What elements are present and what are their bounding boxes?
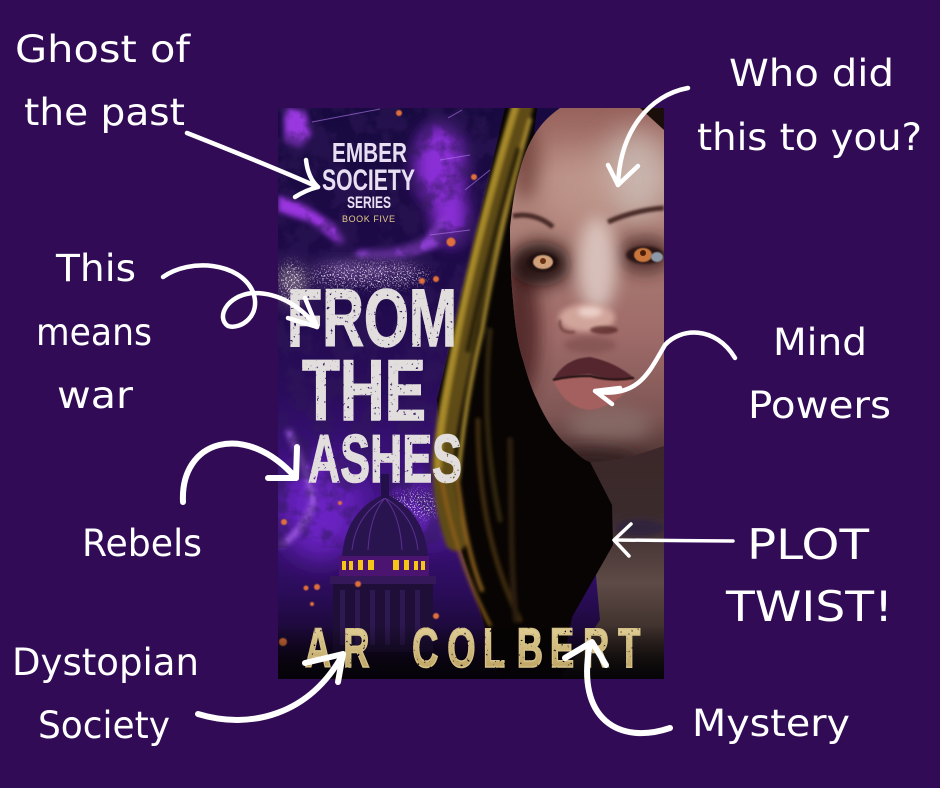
label: this means war — [36, 247, 152, 417]
arrow: plot twist — [614, 524, 733, 556]
series title: SOCIETY — [322, 164, 415, 197]
forehead highlight — [600, 130, 670, 220]
label: dystopian society: Dystopian — [12, 641, 199, 684]
label: dystopian society — [12, 641, 199, 747]
black hair mass — [437, 108, 613, 679]
label: mind powers: Mind — [773, 321, 867, 364]
arrow: who did this — [608, 88, 688, 185]
label: this means war: means — [36, 311, 152, 354]
hair strands — [438, 108, 530, 625]
neck — [574, 446, 664, 662]
chin — [568, 407, 652, 443]
author — [305, 627, 640, 668]
purple nebula splashes — [278, 108, 468, 560]
eyes — [528, 246, 664, 271]
embers — [279, 110, 477, 646]
eye sockets — [510, 242, 570, 286]
face — [510, 108, 664, 462]
lips — [553, 357, 634, 410]
top right hair — [640, 108, 664, 130]
label: plot twist — [725, 520, 893, 631]
capitol dome — [330, 474, 436, 652]
eyebrows — [513, 215, 553, 227]
nose shadow under — [564, 337, 616, 353]
author: AR — [305, 617, 369, 680]
author: COLBERT — [412, 617, 641, 680]
book title: THE — [302, 343, 426, 439]
label: who did this to you: Who did — [729, 52, 894, 95]
arrow: mystery — [565, 642, 670, 733]
book cover — [278, 105, 673, 680]
white speckle dust — [279, 262, 439, 518]
arrow: rebels — [183, 444, 297, 502]
book title: ASHES — [308, 421, 462, 497]
label: dystopian society: Society — [38, 704, 170, 747]
label: ghost of the past: the past — [24, 91, 185, 134]
series title — [322, 137, 415, 224]
label: rebels: Rebels — [82, 522, 202, 565]
series title: SERIES — [347, 193, 391, 212]
label: mind powers: Powers — [748, 384, 891, 427]
series title: BOOK FIVE — [342, 214, 395, 224]
bottom fade — [278, 631, 664, 679]
nose highlight — [577, 217, 617, 313]
label: who did this to you: this to you? — [697, 116, 922, 159]
label: ghost of the past: Ghost of — [15, 28, 191, 71]
arrow: ghost of the past — [187, 133, 318, 197]
arrow: mind powers — [595, 333, 735, 404]
label: ghost of the past — [15, 28, 191, 134]
book title: FROM — [287, 273, 457, 364]
label: mind powers — [748, 321, 891, 427]
dark mottling — [278, 108, 498, 548]
label: plot twist: PLOT — [747, 520, 869, 569]
arrow: this means war — [163, 265, 317, 327]
label: plot twist: TWIST! — [725, 582, 893, 631]
streaks — [312, 109, 490, 235]
left edge shade — [500, 260, 540, 400]
arrow: dystopian society — [198, 654, 343, 720]
book title — [290, 288, 461, 484]
label: who did this to you — [697, 52, 922, 159]
series title: EMBER — [332, 137, 407, 168]
label: this means war: This — [55, 247, 136, 290]
label: mystery: Mystery — [692, 702, 850, 745]
label: this means war: war — [57, 374, 134, 417]
